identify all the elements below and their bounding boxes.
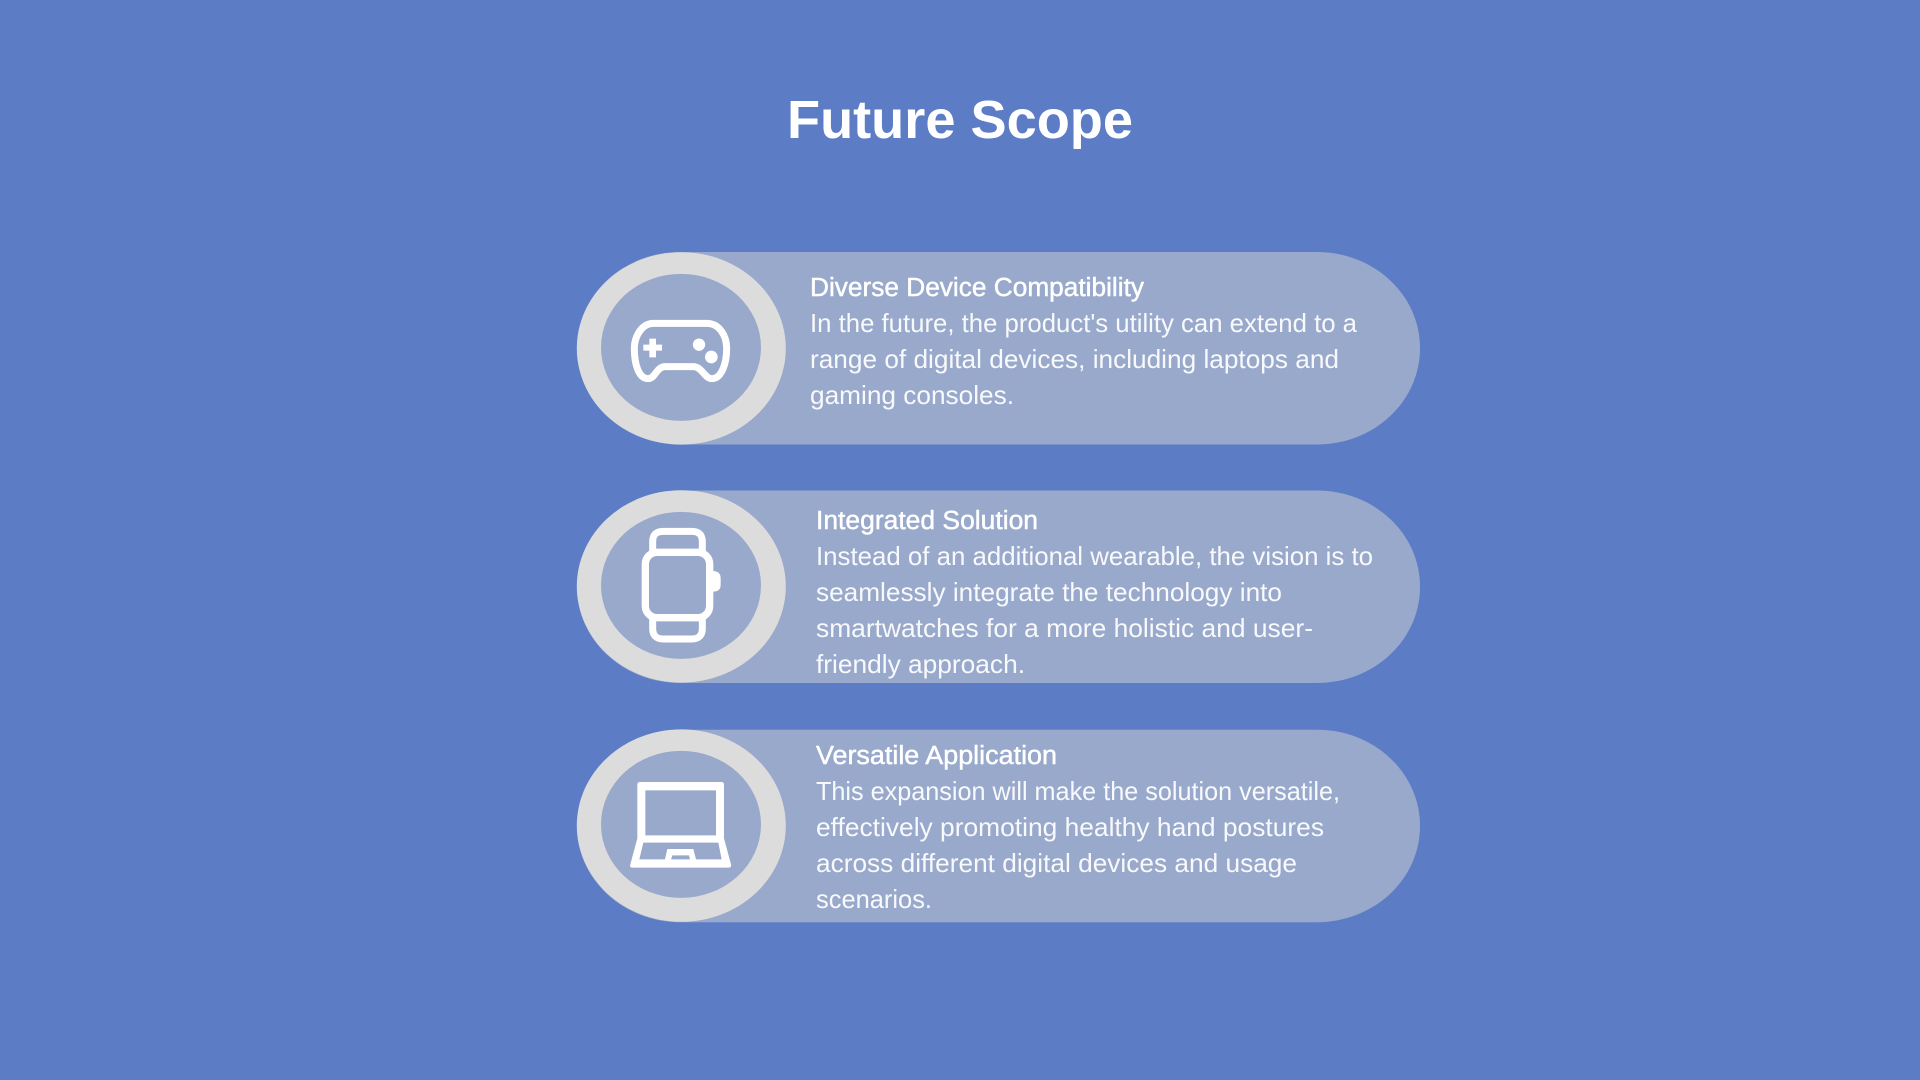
text: heading: Diverse Device Compatibility xyxy=(810,274,1144,302)
icon: laptop xyxy=(630,782,731,868)
text: body: This expansion will make the solution versatile, xyxy=(816,776,1340,806)
pill background xyxy=(577,730,1420,922)
text: body xyxy=(816,776,1340,914)
panel: integrated solution xyxy=(577,490,1420,683)
icon backdrop xyxy=(601,274,761,421)
panel: versatile application xyxy=(577,729,1420,922)
text: body xyxy=(810,308,1358,410)
pill background xyxy=(577,252,1420,444)
text: body: smartwatches for a more holistic and user- xyxy=(816,613,1313,643)
text: body: friendly approach. xyxy=(816,649,1025,679)
text: body: scenarios. xyxy=(816,884,932,914)
icon backdrop xyxy=(601,751,761,898)
icon ring xyxy=(577,490,786,683)
text: heading: Versatile Application xyxy=(816,742,1057,770)
text: body: gaming consoles. xyxy=(810,380,1014,410)
icon: smartwatch xyxy=(645,531,721,639)
icon ring xyxy=(577,729,786,922)
icon: game controller xyxy=(634,323,727,379)
text: heading: Integrated Solution xyxy=(816,507,1038,535)
pill background xyxy=(577,490,1420,683)
text: body: In the future, the product's utility can extend to a xyxy=(810,308,1358,338)
icon backdrop xyxy=(601,512,761,659)
text: body: range of digital devices, including laptops and xyxy=(810,344,1339,374)
panel: diverse device compatibility xyxy=(577,252,1420,445)
title: Future Scope xyxy=(787,90,1133,150)
icon ring xyxy=(577,252,786,445)
text: body: across different digital devices and usage xyxy=(816,848,1297,878)
text: body: seamlessly integrate the technology into xyxy=(816,577,1282,607)
text: body: effectively promoting healthy hand postures xyxy=(816,812,1324,842)
text: body xyxy=(816,541,1373,679)
text: body: Instead of an additional wearable, the vision is to xyxy=(816,541,1373,571)
